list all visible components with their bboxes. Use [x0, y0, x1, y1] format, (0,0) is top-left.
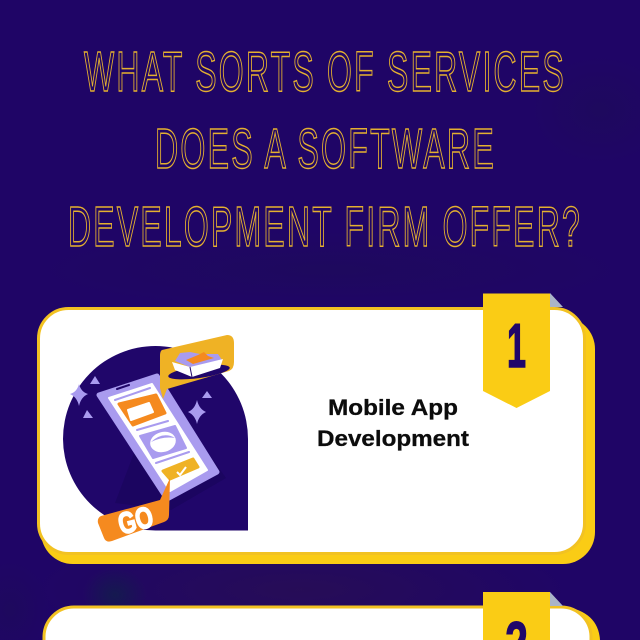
- callout: food bubble: [160, 335, 234, 399]
- panel: card 1 mobile app development: [38, 293, 595, 564]
- ribbon: number 1: 1: [507, 312, 526, 381]
- ribbon: number 1: [483, 294, 550, 408]
- icon: page fold 2: [550, 592, 563, 606]
- title: [68, 40, 582, 259]
- icon: sparkles: [70, 376, 212, 424]
- text: card 1 label: Mobile App: [328, 395, 458, 420]
- ribbon: number 2: [483, 592, 550, 640]
- callout: GO bubble: [98, 478, 170, 542]
- panel: card 2 partial: [44, 592, 600, 640]
- illustration: mobile app: [63, 335, 248, 542]
- text: card 1 label: [317, 395, 470, 451]
- callout: GO bubble: GO: [115, 501, 157, 542]
- text: card 1 label: Development: [317, 426, 470, 451]
- icon: page fold 1: [550, 293, 563, 307]
- icon: phone: [99, 376, 217, 499]
